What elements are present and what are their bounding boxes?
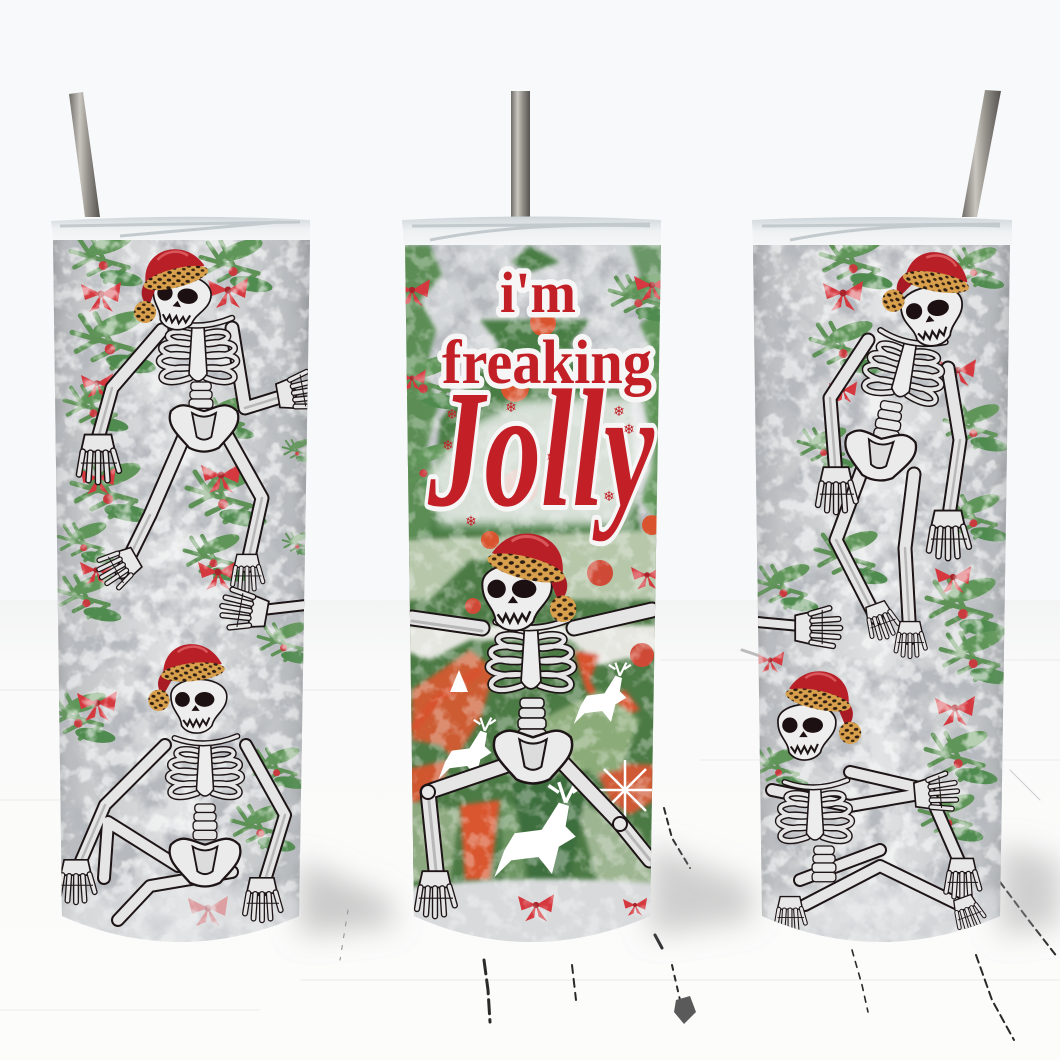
background wall xyxy=(0,0,1060,602)
wooden floor with cracks xyxy=(0,600,1060,1060)
tumbler: left xyxy=(48,217,323,950)
tumbler: center xyxy=(391,216,674,950)
snowflake badges: ❄ xyxy=(613,404,625,420)
snowflake badges: ❄ xyxy=(446,407,458,423)
body print xyxy=(48,228,315,950)
skeleton: top left xyxy=(79,242,323,592)
skeleton: top right xyxy=(818,244,974,657)
lid xyxy=(402,216,661,245)
skeleton: bottom right xyxy=(757,608,987,933)
snowflake decoration xyxy=(599,760,652,818)
ornaments xyxy=(394,274,670,667)
snowflake badges: ❄ xyxy=(546,450,558,466)
snowflake badges: ❄ xyxy=(493,493,505,509)
cast shadows on the floor xyxy=(300,845,1060,935)
snowflake badges: ❄ xyxy=(465,514,477,530)
snowflake badges: ❄ xyxy=(603,489,615,505)
body print xyxy=(405,245,661,942)
tumbler: right xyxy=(750,217,1014,950)
title text: freaking: freaking xyxy=(442,329,652,397)
lower tree panel xyxy=(402,530,664,892)
skeleton: bottom left xyxy=(59,588,306,920)
snowy base xyxy=(414,876,650,893)
snowflake badges: ❄ xyxy=(442,438,454,454)
body print xyxy=(750,231,1014,950)
skeleton: center xyxy=(412,524,652,916)
lid xyxy=(752,217,1012,245)
title text: i'm: i'm xyxy=(500,260,576,325)
title text: Jolly: Jolly xyxy=(427,356,655,542)
snowflake badges: ❄ xyxy=(505,400,517,416)
soft white patch behind Jolly xyxy=(430,395,652,525)
lid xyxy=(51,217,310,240)
straw: right tumbler xyxy=(962,90,1001,217)
snowflake badges: ❄ xyxy=(623,422,635,438)
garland and tree greenery xyxy=(398,245,668,560)
snowflake badges: ❄ xyxy=(585,450,597,466)
straw: center tumbler xyxy=(511,91,530,218)
straw: left tumbler xyxy=(69,92,100,217)
snowflake badges xyxy=(442,400,635,530)
